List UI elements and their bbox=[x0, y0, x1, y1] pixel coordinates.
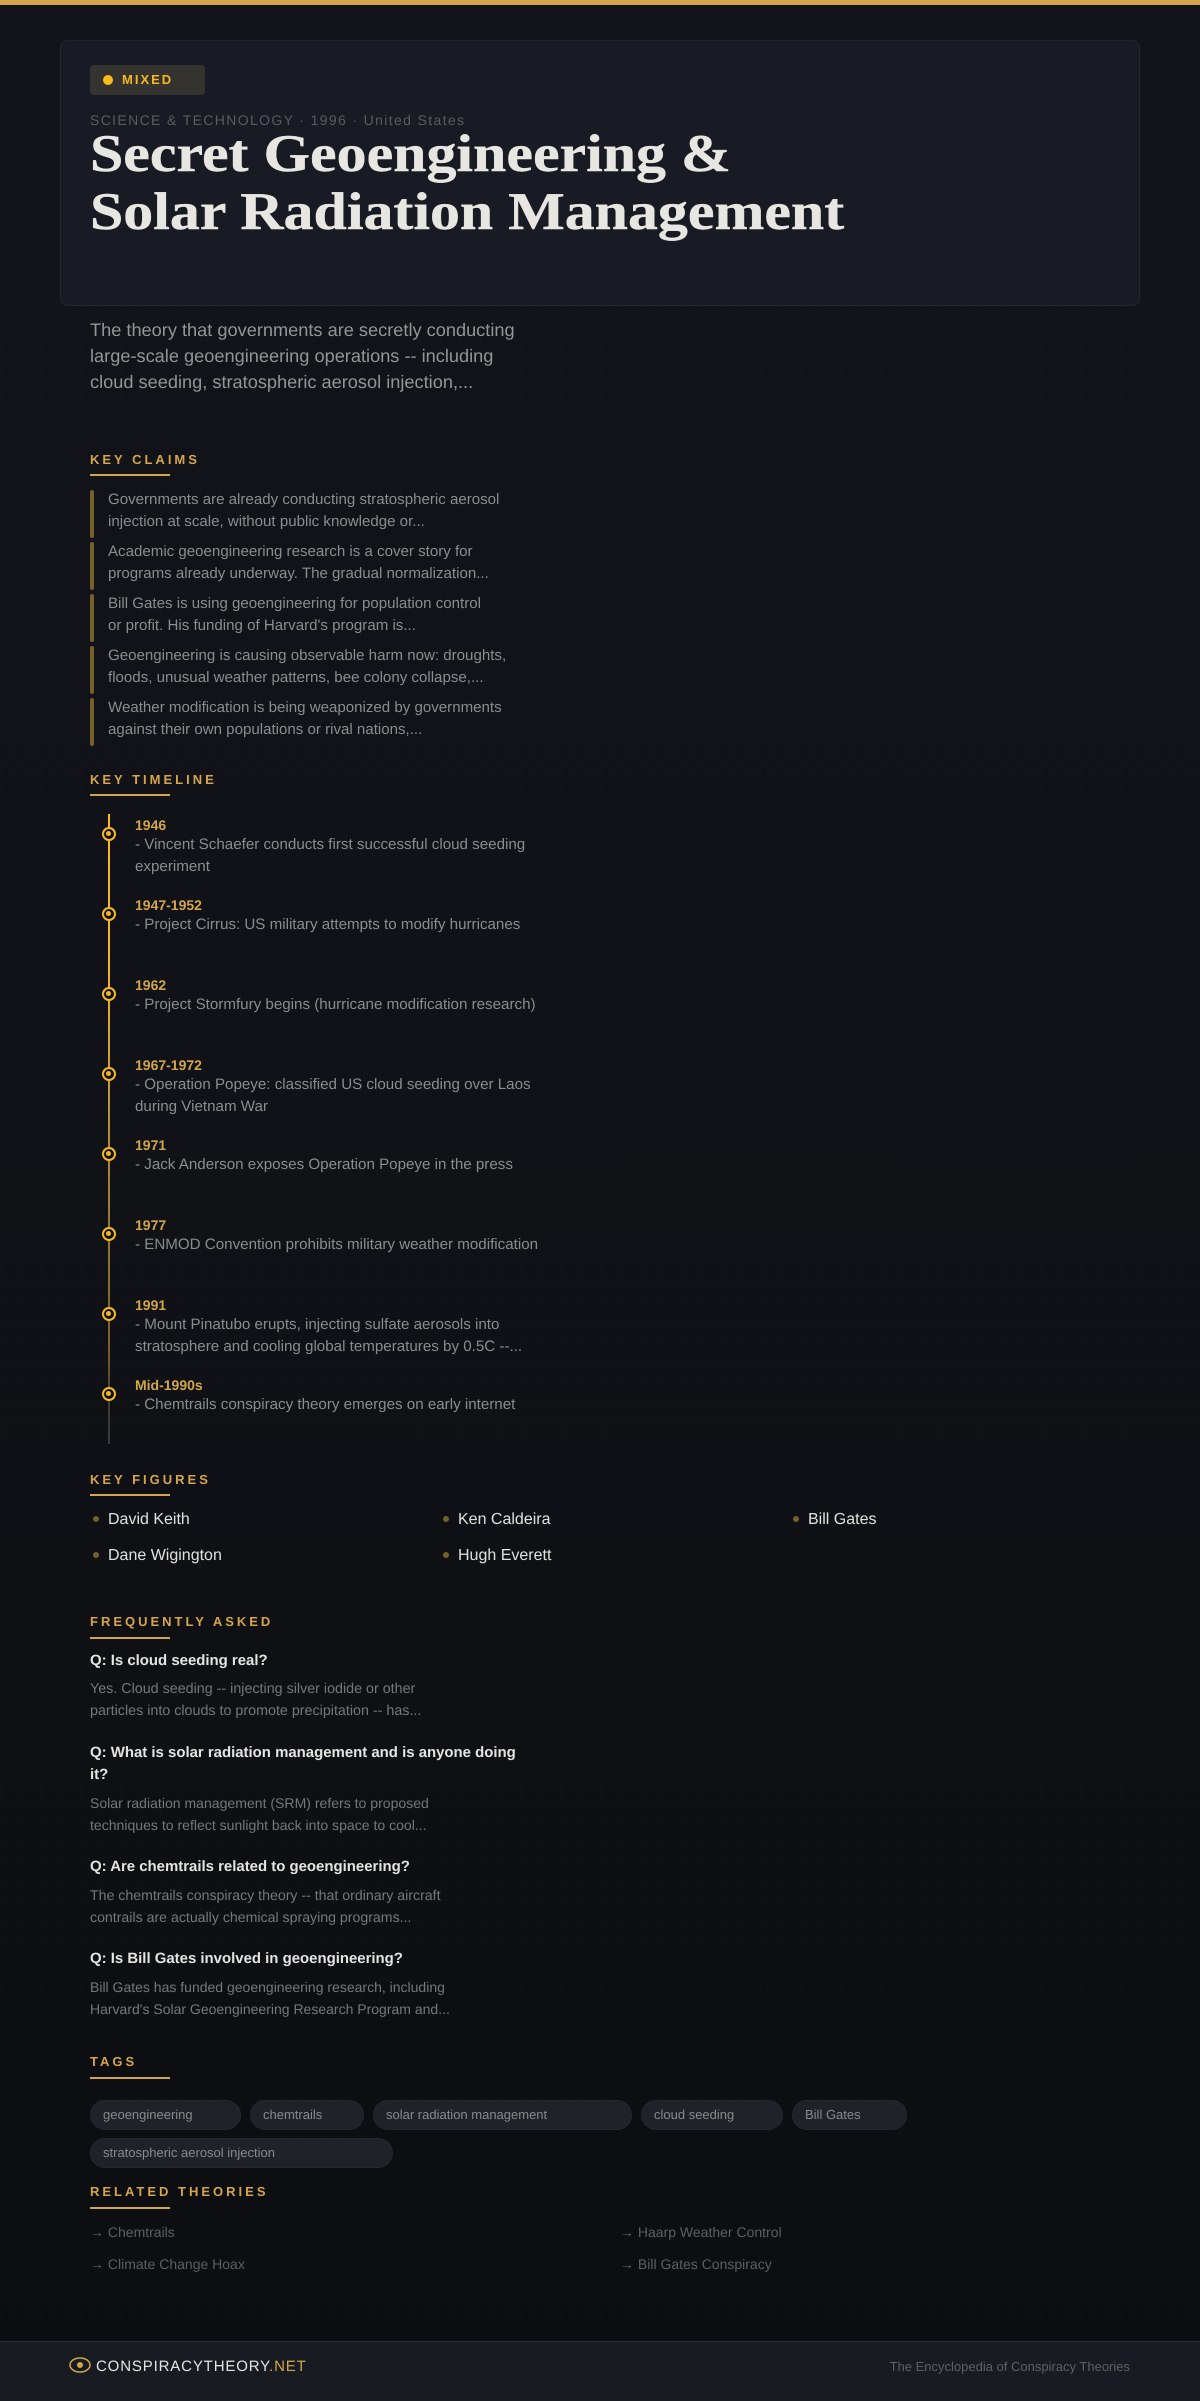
link: Haarp Weather Control: → Haarp Weather Control bbox=[620, 2224, 782, 2240]
intro text bbox=[90, 320, 515, 392]
question 2 bbox=[90, 1744, 516, 1783]
panel: tags bbox=[90, 2054, 907, 2168]
title bbox=[90, 125, 844, 241]
event mid-1990s bbox=[102, 1377, 516, 1413]
panel: header card bbox=[60, 40, 1140, 306]
panel: related theories bbox=[90, 2184, 782, 2272]
heading: related theories: RELATED THEORIES bbox=[90, 2184, 268, 2199]
event 1991: stratosphere and cooling global temperatures by 0.5C --... bbox=[135, 1338, 522, 1355]
event 1977 bbox=[102, 1217, 538, 1253]
event 1991: - Mount Pinatubo erupts, injecting sulfate aerosols into bbox=[135, 1316, 499, 1333]
figure: Bill Gates: Bill Gates bbox=[808, 1511, 876, 1528]
heading: key figures: KEY FIGURES bbox=[90, 1472, 211, 1487]
claim 5: Weather modification is being weaponized by governments bbox=[108, 699, 502, 716]
heading: tags: TAGS bbox=[90, 2054, 137, 2069]
event 1962 bbox=[102, 977, 536, 1013]
heading: key claims: KEY CLAIMS bbox=[90, 452, 200, 467]
answer 3 bbox=[90, 1887, 440, 1925]
tag: stratospheric aerosol injection: stratospheric aerosol injection bbox=[103, 2145, 275, 2160]
panel: key timeline: 1962 bbox=[135, 977, 166, 993]
icon: eye logo bbox=[69, 2357, 91, 2373]
claim 4 bbox=[90, 646, 506, 694]
event 1967-1972 bbox=[102, 1057, 531, 1115]
timeline spine bbox=[108, 814, 110, 1444]
claim 4: Geoengineering is causing observable harm now: droughts, bbox=[108, 647, 506, 664]
answer 1 bbox=[90, 1681, 421, 1719]
link: Bill Gates Conspiracy: → Bill Gates Conspiracy bbox=[620, 2256, 772, 2272]
logo wordmark: CONSPIRACYTHEORY.NET bbox=[96, 2358, 307, 2375]
event 1967-1972: during Vietnam War bbox=[135, 1098, 268, 1115]
claim 2 bbox=[90, 542, 489, 590]
panel: key claims bbox=[90, 452, 506, 746]
category meta line: SCIENCE & TECHNOLOGY · 1996 · United States bbox=[90, 112, 465, 128]
event 1962: - Project Stormfury begins (hurricane modification research) bbox=[135, 996, 536, 1013]
intro text: large-scale geoengineering operations -- including bbox=[90, 346, 493, 366]
event 1947-1952: - Project Cirrus: US military attempts to modify hurricanes bbox=[135, 916, 520, 933]
intro text: The theory that governments are secretly conducting bbox=[90, 320, 515, 340]
figure: Ken Caldeira: Ken Caldeira bbox=[458, 1511, 550, 1528]
tag: geoengineering bbox=[90, 2100, 241, 2130]
event 1977: - ENMOD Convention prohibits military weather modification bbox=[135, 1236, 538, 1253]
answer 2: Solar radiation management (SRM) refers to proposed bbox=[90, 1795, 429, 1811]
badge label: MIXED bbox=[122, 72, 173, 87]
claim 2: Academic geoengineering research is a cover story for bbox=[108, 543, 473, 560]
link: Chemtrails: → Chemtrails bbox=[90, 2224, 175, 2240]
panel: key timeline: 1967-1972 bbox=[135, 1057, 202, 1073]
event 1967-1972: - Operation Popeye: classified US cloud seeding over Laos bbox=[135, 1076, 531, 1093]
footer tagline: The Encyclopedia of Conspiracy Theories bbox=[890, 2359, 1130, 2374]
heading: frequently asked: FREQUENTLY ASKED bbox=[90, 1614, 273, 1629]
title: Secret Geoengineering & bbox=[90, 125, 731, 183]
tag: cloud seeding: cloud seeding bbox=[654, 2107, 734, 2122]
tag: chemtrails: chemtrails bbox=[263, 2107, 322, 2122]
panel: key timeline: Mid-1990s bbox=[135, 1377, 203, 1393]
claim 3: or profit. His funding of Harvard's program is... bbox=[108, 617, 416, 634]
answer 4: Bill Gates has funded geoengineering research, including bbox=[90, 1979, 445, 1995]
tag: geoengineering: geoengineering bbox=[103, 2107, 193, 2122]
intro text: cloud seeding, stratospheric aerosol injection,... bbox=[90, 372, 473, 392]
claim 1: Governments are already conducting stratospheric aerosol bbox=[108, 491, 499, 508]
question 1: Q: Is cloud seeding real? bbox=[90, 1652, 268, 1669]
tag: Bill Gates bbox=[792, 2100, 907, 2130]
panel: key timeline bbox=[90, 772, 538, 1444]
panel: key timeline: 1991 bbox=[135, 1297, 166, 1313]
footer bbox=[0, 2341, 1200, 2401]
claim 2: programs already underway. The gradual normalization... bbox=[108, 565, 489, 582]
claim 4: floods, unusual weather patterns, bee colony collapse,... bbox=[108, 669, 484, 686]
event 1947-1952 bbox=[102, 897, 520, 933]
answer 2 bbox=[90, 1795, 429, 1833]
answer 1: Yes. Cloud seeding -- injecting silver iodide or other bbox=[90, 1681, 415, 1697]
answer 3: contrails are actually chemical spraying programs... bbox=[90, 1909, 411, 1925]
question 2: Q: What is solar radiation management and is anyone doing bbox=[90, 1744, 516, 1761]
tag: cloud seeding bbox=[641, 2100, 783, 2130]
event 1971: - Jack Anderson exposes Operation Popeye in the press bbox=[135, 1156, 513, 1173]
tag: solar radiation management bbox=[373, 2100, 632, 2130]
panel: key timeline: 1947-1952 bbox=[135, 897, 202, 913]
figure: Dane Wigington: Dane Wigington bbox=[108, 1547, 222, 1564]
tag: chemtrails bbox=[250, 2100, 364, 2130]
claim 5: against their own populations or rival nations,... bbox=[108, 721, 422, 738]
answer 1: particles into clouds to promote precipitation -- has... bbox=[90, 1703, 421, 1719]
event 1946: - Vincent Schaefer conducts first successful cloud seeding bbox=[135, 836, 525, 853]
question 2: it? bbox=[90, 1766, 108, 1783]
answer 4 bbox=[90, 1979, 450, 2017]
panel: frequently asked bbox=[90, 1614, 516, 2017]
event mid-1990s: - Chemtrails conspiracy theory emerges on early internet bbox=[135, 1396, 515, 1413]
panel: key timeline: 1946 bbox=[135, 817, 166, 833]
figure: David Keith: David Keith bbox=[108, 1511, 190, 1528]
link: Climate Change Hoax: → Climate Change Hoax bbox=[90, 2256, 245, 2272]
question 3: Q: Are chemtrails related to geoengineering? bbox=[90, 1858, 410, 1875]
panel: key figures bbox=[90, 1472, 876, 1564]
tag: solar radiation management: solar radiation management bbox=[386, 2107, 547, 2122]
title: Solar Radiation Management bbox=[90, 183, 844, 241]
tag: stratospheric aerosol injection bbox=[90, 2138, 393, 2168]
badge: mixed verdict bbox=[90, 65, 205, 95]
event 1971 bbox=[102, 1137, 513, 1173]
claim 3 bbox=[90, 594, 481, 642]
claim 1: injection at scale, without public knowledge or... bbox=[108, 513, 425, 530]
claim 5 bbox=[90, 698, 502, 746]
event 1991 bbox=[102, 1297, 522, 1355]
answer 3: The chemtrails conspiracy theory -- that ordinary aircraft bbox=[90, 1887, 440, 1903]
icon: badge dot bbox=[103, 75, 113, 85]
tag: Bill Gates: Bill Gates bbox=[805, 2107, 861, 2122]
event 1946 bbox=[102, 817, 525, 875]
figure: Hugh Everett: Hugh Everett bbox=[458, 1547, 551, 1564]
answer 4: Harvard's Solar Geoengineering Research Program and... bbox=[90, 2001, 450, 2017]
event 1946: experiment bbox=[135, 858, 210, 875]
claim 1 bbox=[90, 490, 499, 538]
answer 2: techniques to reflect sunlight back into space to cool... bbox=[90, 1817, 427, 1833]
top accent bar bbox=[0, 0, 1200, 5]
question 4: Q: Is Bill Gates involved in geoengineering? bbox=[90, 1950, 403, 1967]
panel: key timeline: 1971 bbox=[135, 1137, 166, 1153]
panel: key timeline: 1977 bbox=[135, 1217, 166, 1233]
heading: key timeline: KEY TIMELINE bbox=[90, 772, 217, 787]
claim 3: Bill Gates is using geoengineering for population control bbox=[108, 595, 481, 612]
